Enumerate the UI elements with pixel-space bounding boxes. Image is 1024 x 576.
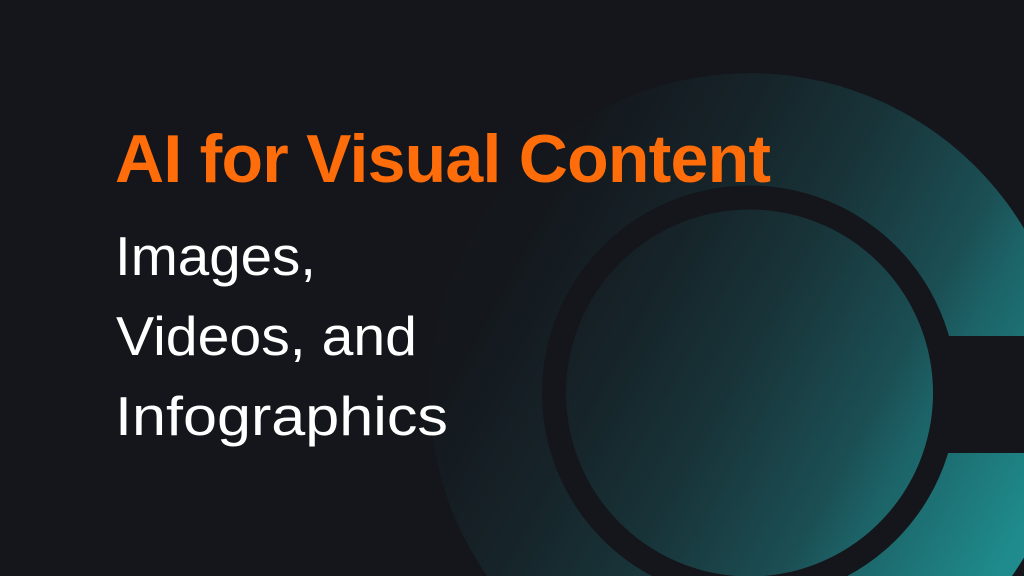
title: AI for Visual Content bbox=[115, 121, 771, 197]
subtitle bbox=[115, 225, 448, 447]
dark horizontal bar bbox=[945, 336, 1024, 453]
inner teal circle bbox=[566, 209, 933, 576]
subtitle line 1: Images, bbox=[115, 225, 316, 287]
subtitle line 3: Infographics bbox=[115, 385, 448, 447]
subtitle line 2: Videos, and bbox=[116, 305, 417, 367]
dark ring gap bbox=[542, 185, 957, 576]
decorative magnifier graphic bbox=[430, 73, 1024, 576]
outer teal ring bbox=[430, 73, 1024, 576]
